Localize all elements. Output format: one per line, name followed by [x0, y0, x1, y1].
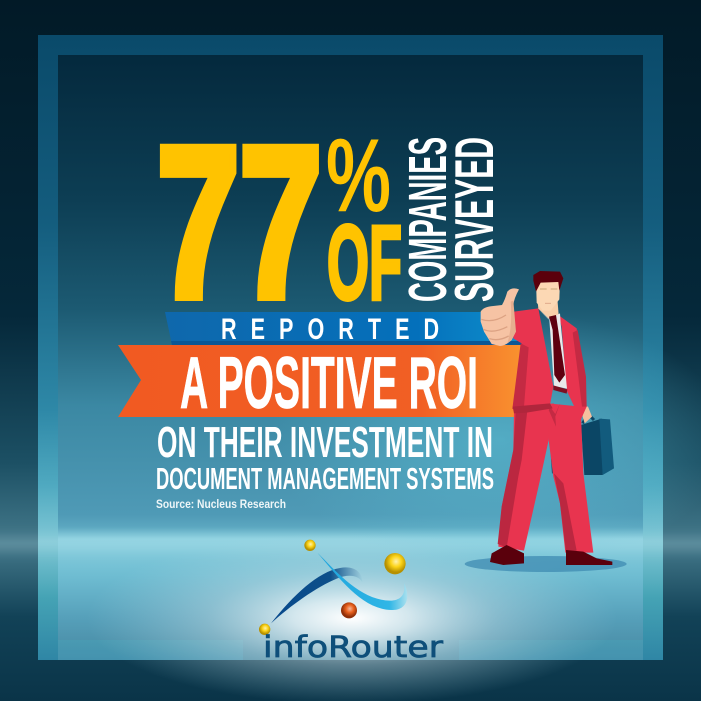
belt [553, 385, 567, 394]
bag hand [583, 406, 592, 423]
hair [533, 271, 563, 292]
logo: inforouter [259, 540, 407, 635]
ribbon text: reported: REPORTED [221, 311, 439, 346]
shadow [465, 556, 627, 572]
trousers [498, 403, 593, 553]
headline: percent sign: % [326, 118, 391, 234]
orange ribbon [118, 345, 522, 417]
shoes [490, 545, 612, 565]
ball: large yellow [384, 553, 406, 574]
source: Source: Nucleus Research [156, 497, 286, 511]
ball: orange [341, 602, 357, 618]
blue ribbon [165, 312, 525, 345]
jacket [512, 308, 587, 420]
vertical text: surveyed: SURVEYED [443, 137, 505, 302]
headline: OF: OF [327, 204, 402, 322]
logo wordmark: infoRouter [263, 630, 443, 664]
dark swoosh [271, 567, 362, 623]
headline: 77: 77 [157, 103, 322, 342]
briefcase [551, 414, 614, 475]
neck and face [536, 280, 560, 319]
light swoosh [317, 553, 407, 610]
businessman thumbs up [465, 271, 627, 572]
tie [549, 315, 565, 383]
thumbs-up hand [481, 288, 519, 346]
shirt [538, 308, 567, 389]
ball: small yellow top [304, 540, 316, 551]
ball: small yellow bottom [259, 624, 270, 635]
